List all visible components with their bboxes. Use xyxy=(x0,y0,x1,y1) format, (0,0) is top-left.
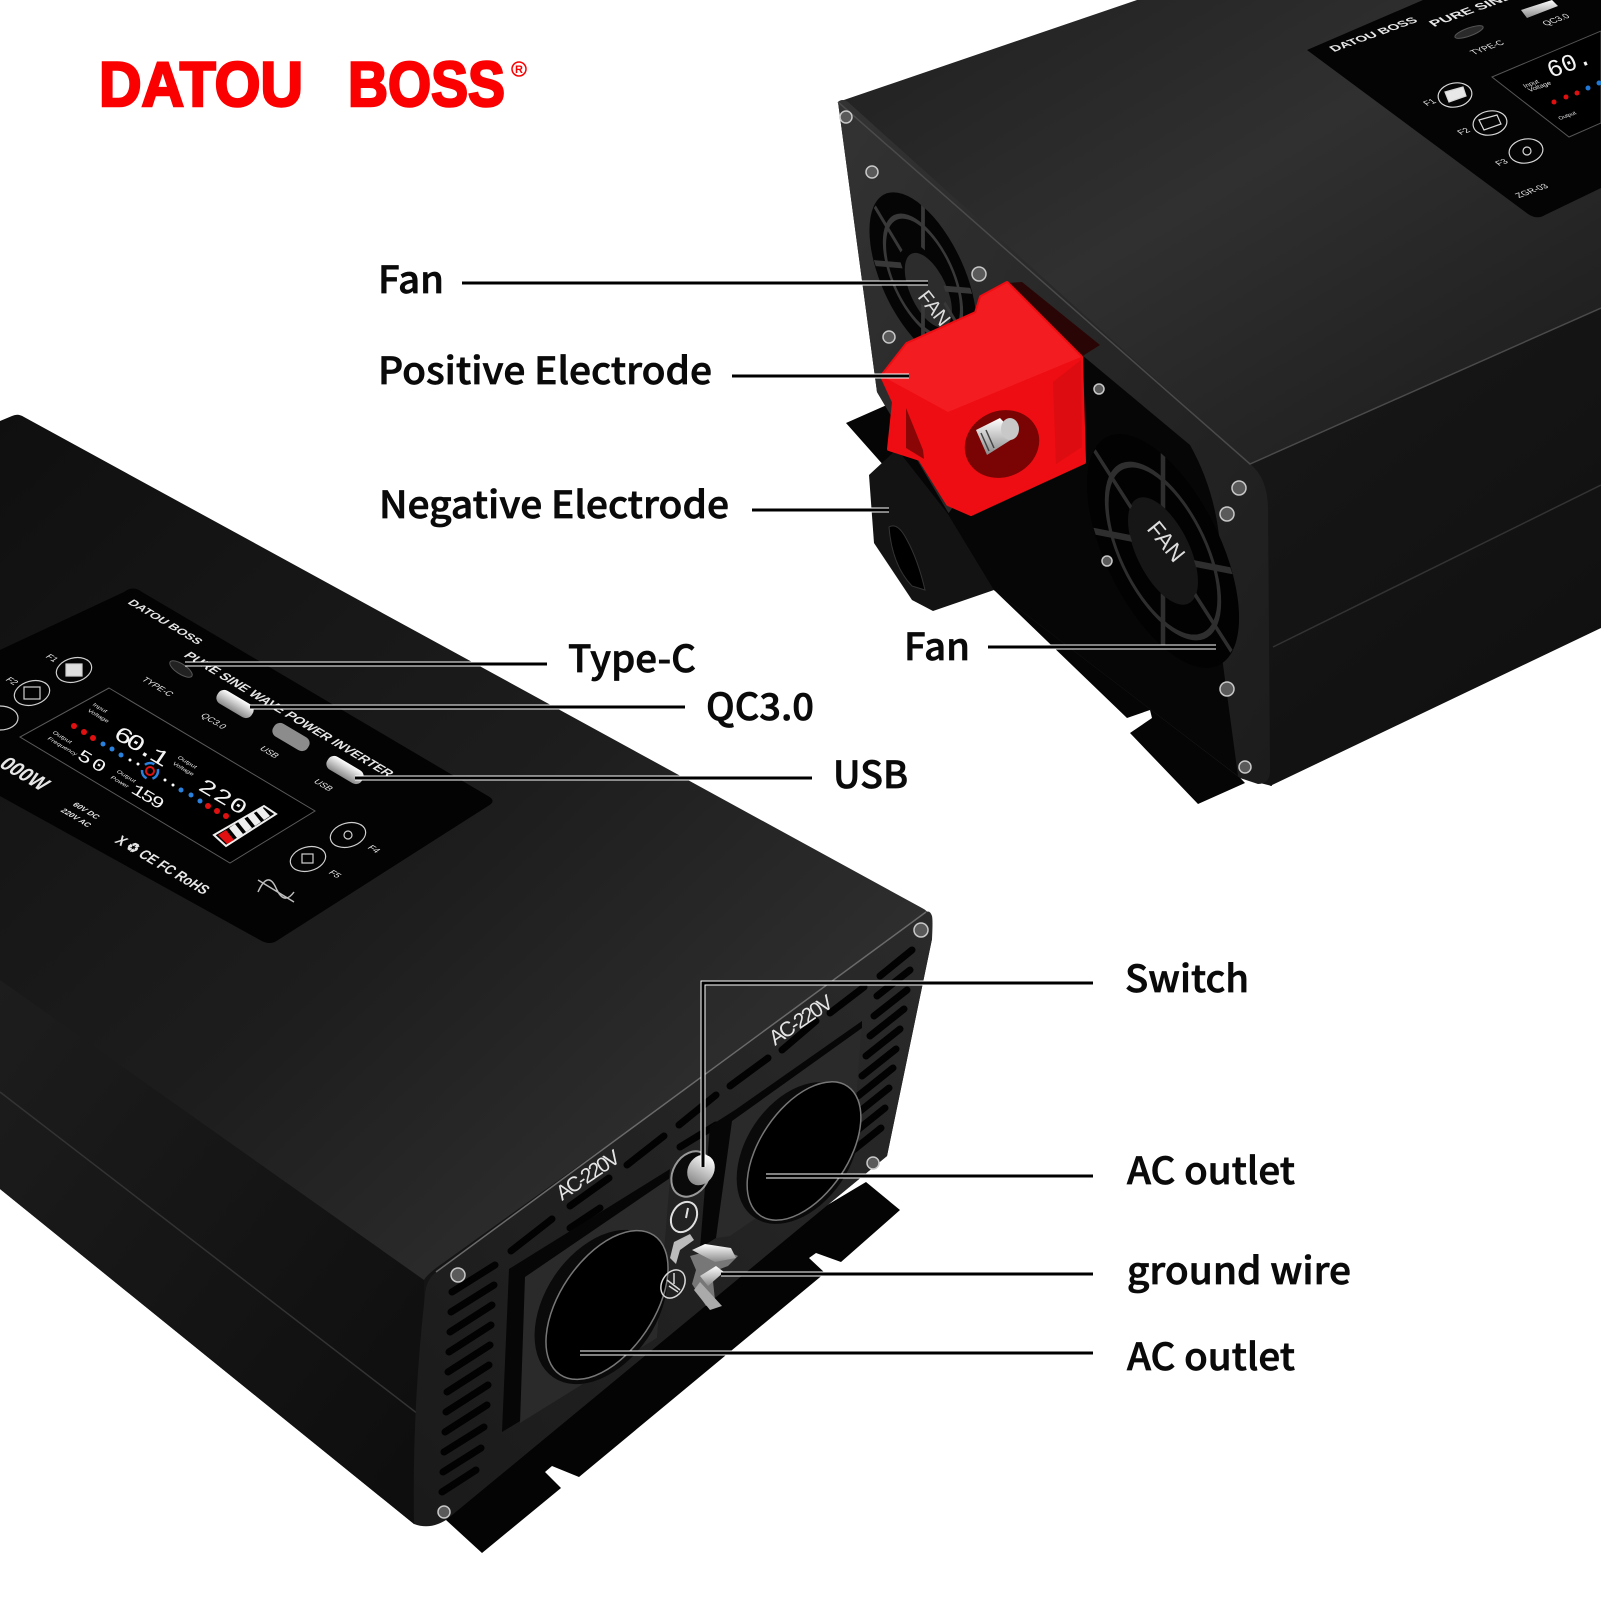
side seam xyxy=(1273,485,1601,647)
mounting bracket xyxy=(846,404,1245,804)
port labels: F2 xyxy=(1455,126,1472,136)
label: Type-C: Type-C xyxy=(568,629,696,683)
spec text: 60V DC xyxy=(70,801,102,820)
lcd screen xyxy=(20,688,315,863)
AC-220V labels xyxy=(552,991,837,1205)
screen: Input xyxy=(1522,79,1541,89)
port labels: QC3.0 xyxy=(1540,12,1572,27)
screen: Output xyxy=(1558,111,1579,121)
mounting bracket xyxy=(446,1182,900,1553)
port labels: F5 xyxy=(326,869,344,879)
label: AC outlet upper: AC outlet xyxy=(1127,1141,1295,1195)
port labels: USB xyxy=(257,745,282,760)
output voltage reading: 220 xyxy=(193,775,251,821)
callout: AC outlet lower xyxy=(580,1350,1093,1356)
power switch xyxy=(663,1144,720,1204)
logo: DATOU BOSS: BOSS xyxy=(348,50,505,120)
small captions: Voltage xyxy=(86,708,111,724)
ground terminal and wing nut xyxy=(670,1234,738,1310)
label: Positive Electrode: Positive Electrode xyxy=(378,341,712,395)
logo: DATOU BOSS: DATOU xyxy=(99,50,303,120)
top face xyxy=(838,0,1601,464)
small captions: Output xyxy=(115,769,138,784)
long side face xyxy=(1250,308,1601,786)
panel heading: PURE SINE WAVE POWER INVERTER xyxy=(180,650,398,779)
AC outlet left xyxy=(502,1169,695,1432)
fan two label: FAN xyxy=(1142,516,1190,567)
port labels xyxy=(3,653,383,879)
spec text xyxy=(58,801,102,829)
screen: Voltage xyxy=(1527,80,1553,93)
label: USB: USB xyxy=(833,745,908,799)
callout: QC3.0 xyxy=(250,704,685,710)
flow indicators xyxy=(71,723,229,819)
label: ground wire: ground wire xyxy=(1127,1241,1351,1295)
certifications: X ♻ CE FC RoHS xyxy=(111,833,213,898)
negative electrode terminal xyxy=(869,449,1060,611)
callout: Positive Electrode xyxy=(732,374,909,378)
small captions: Input xyxy=(91,702,109,714)
port labels xyxy=(1421,12,1572,199)
panel brand: DATOU BOSS xyxy=(124,598,205,646)
logo: DATOU BOSS: R xyxy=(515,64,523,76)
top face xyxy=(0,415,928,1280)
display panel top right xyxy=(1307,0,1601,217)
body underlay xyxy=(0,421,932,1524)
battery gauge xyxy=(214,806,276,846)
vent slots xyxy=(442,950,912,1492)
callout: Switch xyxy=(703,983,1093,1167)
callout: Negative Electrode xyxy=(752,508,889,512)
port labels: QC3.0 xyxy=(198,712,229,730)
type-c port xyxy=(167,658,195,680)
callout: USB xyxy=(355,776,812,780)
port labels: F4 xyxy=(365,844,383,854)
label: Negative Electrode: Negative Electrode xyxy=(379,475,729,529)
usb ports xyxy=(214,687,366,787)
positive electrode terminal xyxy=(882,282,1100,514)
label: AC outlet lower: AC outlet xyxy=(1127,1327,1295,1381)
function buttons xyxy=(0,654,368,875)
power reading: 159 xyxy=(127,781,168,814)
corner screws xyxy=(438,923,928,1518)
port labels: TYPE-C xyxy=(1468,39,1507,56)
port labels: USB xyxy=(311,778,336,793)
sine icon xyxy=(258,880,294,902)
callout: Fan lower xyxy=(988,644,1216,650)
callout: Fan upper xyxy=(462,280,928,286)
label: Fan upper: Fan xyxy=(378,250,444,304)
spec text: 220V AC xyxy=(58,807,94,829)
callout: ground wire xyxy=(721,1272,1093,1276)
fan one label: FAN xyxy=(913,287,954,331)
small captions: Output xyxy=(176,755,199,770)
small captions xyxy=(46,702,199,789)
small captions: Output xyxy=(51,730,74,745)
fan two xyxy=(1087,388,1239,714)
small captions: Voltage xyxy=(171,761,196,777)
port labels: F3 xyxy=(1493,157,1510,167)
shadowed lower face xyxy=(948,345,1238,776)
AC-220V labels: AC-220V xyxy=(765,991,837,1050)
ground symbol xyxy=(656,1266,690,1302)
display panel bottom left xyxy=(0,588,492,943)
panel brand: DATOU BOSS xyxy=(1327,16,1421,54)
port labels: F1 xyxy=(43,653,61,663)
label: Fan lower: Fan xyxy=(904,617,970,671)
callout: Type-C xyxy=(185,662,547,666)
logo: DATOU BOSS xyxy=(99,50,526,120)
front outlet face xyxy=(414,912,932,1526)
port labels: F2 xyxy=(3,676,21,686)
fan one xyxy=(869,160,977,394)
screen xyxy=(1492,31,1601,137)
frequency reading: 50 xyxy=(73,747,109,778)
screen: 60. xyxy=(1543,45,1597,85)
port labels: F1 xyxy=(1421,97,1438,107)
label: QC3.0: QC3.0 xyxy=(706,677,814,731)
inverter: bottom left unit xyxy=(0,415,932,1553)
screws xyxy=(840,111,1251,773)
ports xyxy=(1454,0,1558,41)
callout: AC outlet upper xyxy=(766,1174,1093,1178)
edge highlight xyxy=(838,102,1601,464)
port labels: ZGR-03 xyxy=(1513,182,1551,199)
side seam xyxy=(0,1092,418,1414)
small captions: Frequency xyxy=(46,736,80,757)
port labels: TYPE-C xyxy=(139,676,177,698)
AC outlet right xyxy=(700,1021,885,1248)
front fan face xyxy=(838,100,1270,784)
function buttons xyxy=(1436,80,1545,166)
AC-220V labels: AC-220V xyxy=(552,1146,624,1205)
edge highlight xyxy=(436,912,926,1272)
body underlay xyxy=(838,102,1272,786)
small captions: Power xyxy=(109,775,130,789)
power symbol xyxy=(666,1197,702,1237)
label: Switch: Switch xyxy=(1125,949,1249,1003)
inverter: top right unit xyxy=(838,0,1601,804)
input voltage reading: 60.1 xyxy=(108,722,174,773)
long side face xyxy=(0,980,425,1524)
